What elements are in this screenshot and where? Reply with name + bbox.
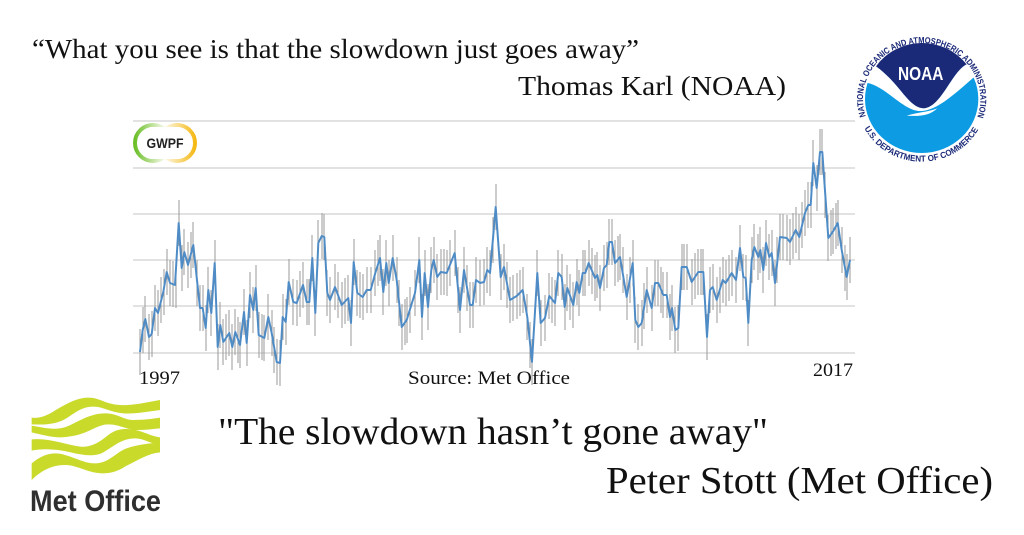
top quote attribution: Thomas Karl (NOAA) [518, 71, 786, 101]
chart grid lines [133, 121, 855, 353]
Met Office wordmark: Met Office [30, 485, 161, 518]
logo: NOAA [856, 37, 986, 162]
temperature line [140, 152, 850, 363]
bottom quote attribution: Peter Stott (Met Office) [606, 460, 993, 502]
source label: Source: Met Office [408, 368, 570, 389]
Met Office wave bands [32, 398, 160, 480]
error bars [140, 129, 850, 386]
logo: GWPF: GWPF [146, 135, 184, 151]
bottom quote: "The slowdown hasn’t gone away" [218, 411, 768, 453]
logo: NOAA: NOAA [898, 63, 943, 84]
top quote: “What you see is that the slowdown just goes away” [32, 34, 639, 64]
x axis label: 1997: 1997 [139, 368, 180, 389]
x axis label: 2017: 2017 [813, 360, 853, 381]
logo: GWPF [135, 125, 195, 161]
logo: NOAA: NATIONAL OCEANIC AND ATMOSPHERIC ADMINISTRATION [856, 37, 986, 118]
logo: Met Office [30, 398, 161, 518]
line chart with error bars [133, 121, 855, 386]
logo: NOAA: U.S. DEPARTMENT OF COMMERCE [865, 126, 978, 162]
